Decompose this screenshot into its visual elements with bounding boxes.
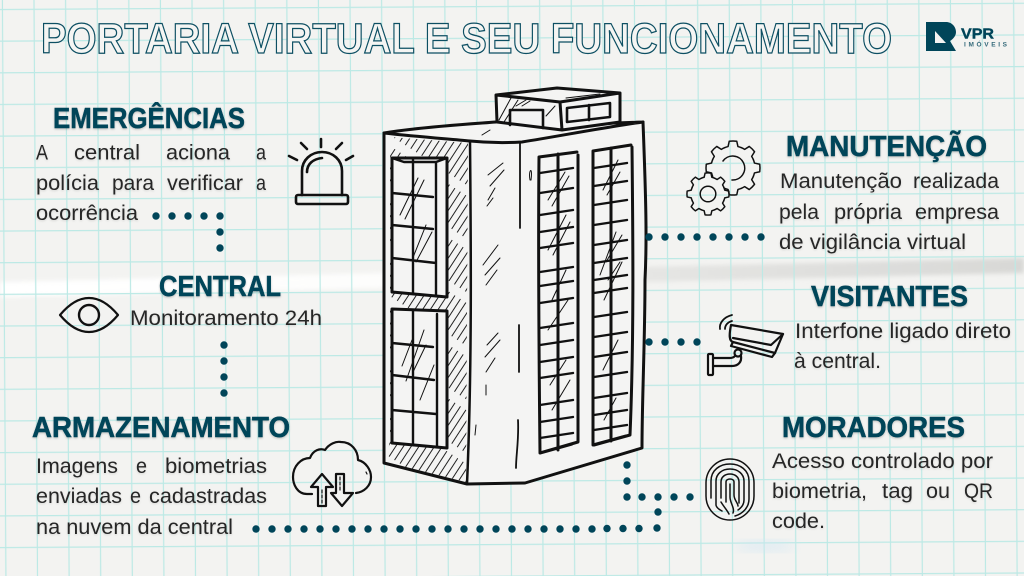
text block: manutenção [779, 170, 999, 254]
text block: central: Monitoramento 24h [130, 307, 322, 330]
left windows [392, 158, 447, 297]
hatched left face [386, 137, 468, 482]
text block: armazenamento: cadastradas [149, 485, 267, 508]
connector: building to manutenção [645, 233, 765, 241]
text block: manutenção: de vigilância virtual [779, 231, 966, 254]
text block: emergências: verificar [167, 172, 243, 195]
text block: manutenção: própria [834, 201, 902, 224]
icon: siren [289, 139, 353, 204]
icon: cloud upload and download [293, 442, 371, 506]
text block: moradores: code. [772, 510, 825, 533]
connector: central to armazenamento [220, 341, 228, 397]
rooftop unit [496, 88, 620, 130]
text block: emergências: central [74, 142, 140, 164]
text block: emergências: aciona [166, 142, 230, 164]
text block: manutenção: empresa [915, 201, 999, 224]
panel: armazenamento [32, 412, 371, 539]
heading: visitantes: VISITANTES [811, 281, 968, 313]
panel: manutenção [687, 129, 999, 254]
text block: manutenção: realizada [913, 170, 999, 193]
heading: moradores: MORADORES [782, 412, 965, 444]
text block: moradores: Acesso controlado por [772, 450, 993, 473]
panel: central [60, 271, 322, 332]
text block: emergências: a [256, 142, 266, 164]
right windows [539, 152, 578, 453]
text block: armazenamento: Imagens [36, 455, 118, 478]
icon: gears [687, 141, 760, 215]
connector: armazenamento to building [252, 508, 662, 533]
text block: armazenamento: e [130, 485, 141, 508]
heading: emergências: EMERGÊNCIAS [53, 101, 245, 135]
building body [384, 122, 645, 484]
logo: VPR Imóveis [926, 22, 1008, 51]
text block: visitantes [794, 320, 1011, 373]
text block: emergências: A [36, 142, 48, 164]
text block: manutenção: pela [779, 201, 819, 224]
logo: VPR Imóveis: VPR [961, 26, 994, 42]
panel: emergências [36, 101, 353, 225]
connector: emergências to central [152, 212, 224, 252]
text block: moradores: biometria, [772, 480, 867, 503]
text block: armazenamento: enviadas [36, 485, 122, 508]
text block: visitantes: Interfone ligado direto [795, 320, 1011, 343]
text block: moradores: ou [926, 480, 950, 503]
text block: manutenção: Manutenção [780, 170, 902, 193]
text block: emergências: a [256, 172, 266, 195]
text block: armazenamento: biometrias [165, 455, 267, 478]
title: PORTARIA VIRTUAL E SEU FUNCIONAMENTO [41, 15, 892, 63]
text block: emergências: polícia [36, 172, 99, 195]
icon: security camera [708, 315, 783, 375]
panel: visitantes [708, 281, 1011, 375]
icon: fingerprint [706, 459, 754, 520]
building illustration [384, 88, 646, 484]
connector: building to moradores [623, 461, 694, 501]
connector: building to visitantes [645, 338, 701, 346]
text block: armazenamento [36, 455, 267, 539]
text block: emergências: para [112, 172, 154, 195]
text block: moradores [772, 450, 993, 533]
text block: emergências [36, 142, 266, 225]
panel: moradores [706, 412, 993, 533]
text block: armazenamento: e [136, 455, 147, 478]
logo: VPR Imóveis: IMÓVEIS [964, 40, 1008, 48]
heading: central: CENTRAL [159, 271, 281, 303]
text block: moradores: QR [964, 480, 993, 503]
text block: armazenamento: na nuvem da central [36, 516, 233, 539]
heading: armazenamento: ARMAZENAMENTO [32, 412, 290, 444]
heading: manutenção: MANUTENÇÃO [786, 129, 987, 163]
text block: emergências: ocorrência [36, 202, 138, 225]
text block: visitantes: à central. [794, 350, 881, 373]
text block: moradores: tag [882, 480, 913, 503]
icon: eye [60, 298, 118, 332]
